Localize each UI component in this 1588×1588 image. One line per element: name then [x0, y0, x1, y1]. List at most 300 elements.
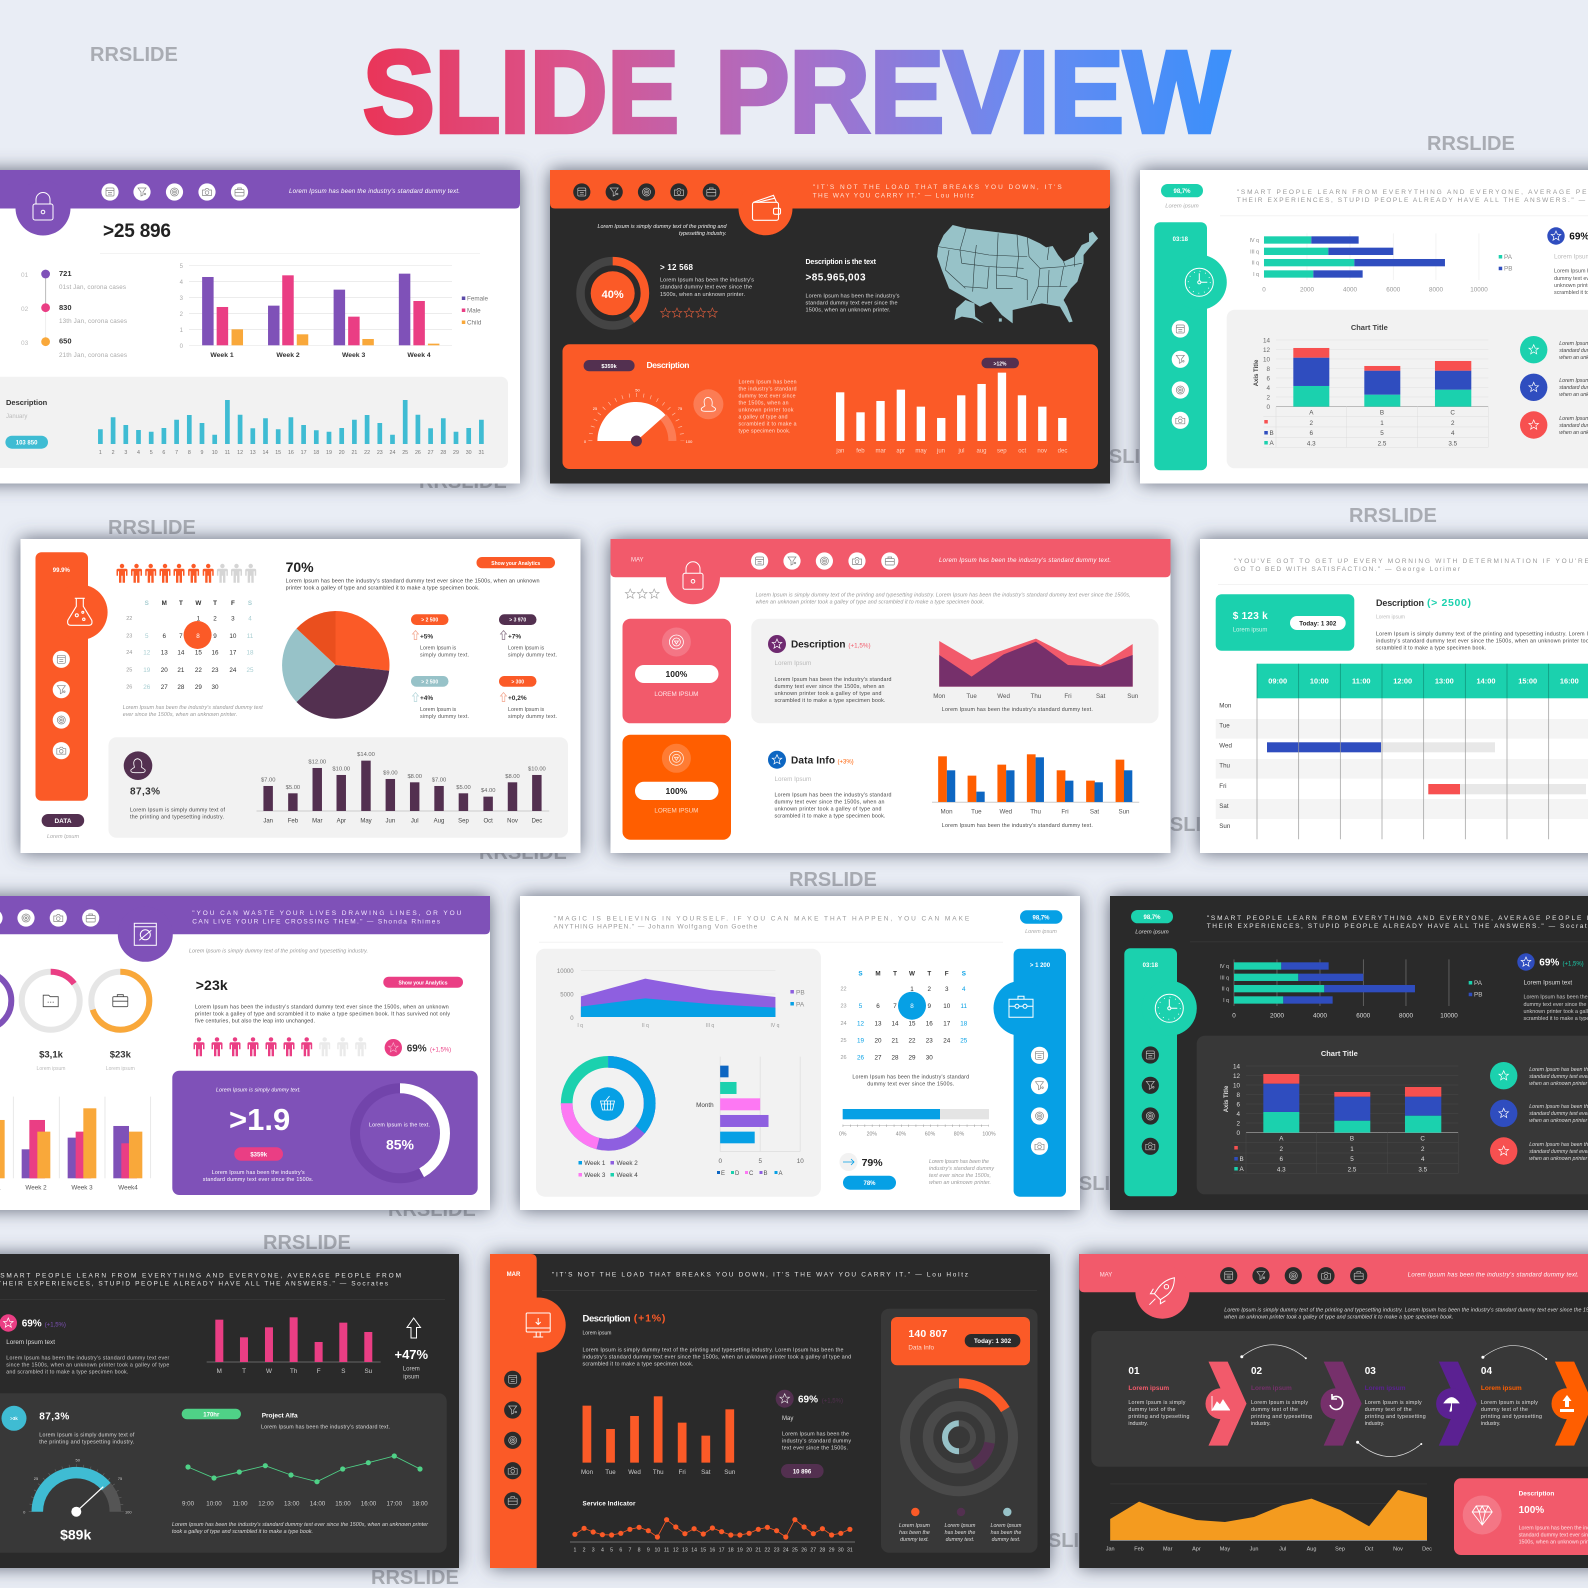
stacked bar chart: II q	[1222, 987, 1229, 993]
panel: radial progress: dummy text.	[992, 1537, 1020, 1543]
panel: radial progress: dummy text.	[946, 1537, 974, 1543]
pill: data: Lorem Ipsum	[47, 834, 79, 840]
panel: description area chart: (+1,5%)	[848, 642, 871, 650]
panel: radial progress: has been the	[899, 1530, 930, 1536]
line chart: service indicator: 6	[619, 1548, 622, 1554]
header band	[1079, 1254, 1588, 1292]
sidebar: > 1 200	[1030, 963, 1051, 969]
calendar: T	[213, 600, 217, 607]
line chart: service indicator: 26	[801, 1548, 807, 1554]
panel: daily bars: 4	[137, 450, 140, 456]
calendar: 24	[840, 1021, 847, 1027]
panel: slide 10 dark pink dashboard	[0, 1254, 459, 1568]
panel: gauge and line chart: 17:00	[387, 1500, 403, 1508]
stat: 79%: text ever since the 1500s,	[929, 1173, 991, 1179]
panel: daily bars: 1	[99, 450, 102, 456]
bar chart: week: Fri	[679, 1469, 686, 1476]
panel: orange gauge and bars: 50	[635, 388, 640, 392]
panel: slide 12 coral process: MAY	[1100, 1272, 1112, 1278]
line chart: service indicator: 28	[820, 1548, 825, 1554]
paragraph: printer took a galley of type and scrambled it to make a type specimen book. It has survived not only	[195, 1012, 450, 1018]
panel: daily bars: 103 850	[16, 441, 38, 447]
line chart: service indicator: 9	[647, 1548, 650, 1554]
pill: analytics: Show your Analytics	[398, 980, 448, 986]
kpi list: > 3 970	[509, 618, 526, 624]
panel: description area chart: Mon	[933, 693, 946, 700]
gantt table: 09:00	[1268, 676, 1287, 686]
intro text	[598, 224, 728, 237]
kpi list: simply dummy text.	[420, 714, 469, 720]
sidebar	[36, 552, 108, 801]
gantt table: Sat	[1219, 803, 1229, 810]
line chart: service indicator	[570, 1500, 855, 1554]
title: SLIDE	[363, 27, 679, 157]
line chart: service indicator: 27	[810, 1548, 816, 1554]
panel: gauge and line chart: 18:00	[412, 1500, 428, 1508]
sidebar: 99.9%	[53, 568, 70, 574]
icon: rocket badge	[1135, 1265, 1189, 1319]
description: scrambled it to make a type specimen book.	[1376, 646, 1486, 652]
progress bar: 100%	[982, 1132, 996, 1138]
sidebar	[1154, 222, 1227, 470]
horizontal bar chart: B	[764, 1171, 768, 1177]
panel: slide 11 orange dark dashboard	[490, 1254, 1050, 1568]
gantt table: 12:00	[1393, 676, 1412, 686]
slide background	[550, 170, 1110, 484]
panel: daily bars: 17	[301, 450, 307, 456]
arrow: up +47%	[394, 1318, 429, 1381]
gantt table: 13:00	[1435, 676, 1454, 686]
panel: description area chart: Sun	[1127, 693, 1139, 700]
panel: radial progress: 140 807	[908, 1328, 948, 1340]
quote: ANYTHING HAPPEN." — Johann Wolfgang Von Goethe	[554, 924, 758, 931]
calendar: 3	[945, 986, 949, 993]
panel: gauge and line chart: 25	[34, 1476, 39, 1481]
watermarks: RRSLIDE	[479, 842, 567, 864]
panel: chart title	[1227, 310, 1588, 468]
calendar note: dummy text ever since the 1500s.	[867, 1082, 954, 1088]
panel: purple summary: $359k	[250, 1153, 268, 1159]
panel: monthly revenue: $12.00	[308, 760, 326, 766]
area chart: yearly: Mar	[1163, 1546, 1173, 1552]
line chart: service indicator: 5	[610, 1548, 613, 1554]
calendar: 19	[143, 667, 151, 674]
bar chart: weekly: 5	[180, 264, 184, 270]
timeline: 03	[21, 340, 29, 347]
calendar: 13	[161, 650, 168, 656]
horizontal bar chart: E	[721, 1171, 725, 1177]
watermarks: RRSLIDE	[1141, 814, 1229, 836]
stacked bar chart: II q	[1252, 261, 1259, 267]
panel: purple summary: Lorem Ipsum is simply dummy text.	[216, 1088, 301, 1094]
stat: 69%: (+1,5%)	[45, 1322, 66, 1328]
quote	[813, 184, 1062, 200]
donut values: $3,1k	[39, 1050, 64, 1060]
section: data info bars: Thu	[1030, 808, 1041, 816]
section: data info bars: Tue	[971, 808, 982, 816]
panel: chart title: 8	[1266, 366, 1270, 373]
panel: monthly revenue: $7.00	[432, 778, 446, 784]
calendar: 14	[177, 650, 185, 656]
panel: process steps: industry.	[1481, 1421, 1501, 1427]
panel: slide 1 purple dashboard	[0, 170, 520, 484]
line chart: service indicator: 3	[592, 1548, 595, 1554]
calendar: 11	[961, 1003, 968, 1010]
quote: "YOU CAN WASTE YOUR LIVES DRAWING LINES, OR YOU	[192, 910, 462, 917]
progress bar: 40%	[896, 1132, 906, 1138]
panel: daily bars: 29	[453, 450, 459, 456]
calendar: 18	[246, 650, 254, 656]
stat: 12 568: 1500s, when an unknown printer.	[660, 292, 745, 298]
quote	[1207, 915, 1588, 930]
watermarks: RRSLIDE	[1050, 1173, 1138, 1195]
headline number: >25 896	[103, 221, 171, 242]
stat: 69%: May	[782, 1416, 793, 1422]
panel: slide 2 orange dark dashboard	[550, 170, 1110, 484]
panel: daily bars: 14	[263, 450, 268, 456]
quote: "SMART PEOPLE LEARN FROM EVERYTHING AND EVERYONE, AVERAGE PEOPLE FROM	[0, 1272, 401, 1280]
panel: process steps: 04	[1481, 1366, 1492, 1377]
horizontal bar chart: D	[735, 1171, 740, 1177]
intro text: when an unknown printer took a galley of type and scrambled it to make a type specimen book.	[1224, 1314, 1453, 1320]
stacked bar chart: 4000	[1313, 1012, 1327, 1020]
watermarks: RRSLIDE	[789, 869, 877, 891]
bar chart: weekly: Week 1	[210, 352, 234, 359]
panel: orange gauge and bars: scrambled it to make a	[738, 422, 797, 428]
panel: daily bars: 12	[237, 450, 243, 456]
sidebar: 03:18	[1143, 963, 1159, 969]
panel: process steps: Lorem Ipsum is simply	[1481, 1400, 1538, 1406]
panel: purple summary: Lorem Ipsum is the text.	[369, 1122, 430, 1128]
area chart: yearly: Oct	[1365, 1546, 1374, 1552]
bar chart: week: Mon	[581, 1469, 594, 1476]
gantt table: Tue	[1219, 722, 1230, 730]
calendar: 24	[943, 1038, 951, 1044]
calendar: 27	[161, 684, 168, 691]
panel: daily bars: 22	[364, 450, 370, 456]
bar chart: week: Thu	[653, 1469, 664, 1476]
panel: chart title: when an unknown printer	[1529, 1156, 1588, 1162]
panel: chart title: 5	[1380, 430, 1384, 437]
panel: chart title: 4	[1421, 1156, 1425, 1163]
panel: chart title: 4	[1236, 1111, 1240, 1118]
panel: orange gauge and bars: a galley of type and	[738, 414, 788, 420]
card: description 100%: 100%	[1519, 1505, 1544, 1516]
calendar: 29	[908, 1054, 916, 1062]
panel: process steps: industry.	[1365, 1421, 1384, 1427]
panel: monthly revenue: $7.00	[261, 778, 275, 784]
panel: gauge and line chart: 15:00	[335, 1500, 351, 1508]
intro text	[1224, 1308, 1588, 1320]
calendar: M	[162, 600, 167, 607]
panel: chart title: 10	[1263, 356, 1270, 364]
bar chart: week: Wed	[628, 1469, 641, 1476]
calendar: 5	[859, 1003, 863, 1010]
calendar: W	[195, 600, 201, 607]
description	[582, 1312, 851, 1368]
timeline: 830	[59, 303, 72, 312]
panel: process steps: dummy text of the	[1251, 1407, 1298, 1413]
slide background	[1140, 170, 1588, 484]
bar chart: weeks: Week 2	[25, 1184, 47, 1192]
area chart: PA	[796, 1002, 805, 1008]
stat: 79%: 79%	[862, 1157, 883, 1169]
panel: daily bars: 30	[466, 450, 472, 456]
panel: orange gauge and bars: 25	[593, 406, 598, 411]
pill: analytics: Show your Analytics	[491, 561, 541, 567]
pill: 98,7%	[1020, 910, 1062, 935]
panel: process steps: 03	[1365, 1366, 1376, 1377]
icon row	[101, 183, 248, 201]
horizontal bar chart	[696, 1057, 804, 1177]
panel: chart title: A	[1270, 440, 1274, 447]
kpi list: > 2 500	[421, 618, 438, 624]
panel: chart title: Chart Title	[1351, 323, 1388, 332]
bar chart: pink week: S	[341, 1368, 345, 1375]
timeline: 13th Jan, corona cases	[59, 318, 127, 325]
calendar: 17	[943, 1020, 951, 1028]
line chart: service indicator: 23	[774, 1548, 780, 1554]
panel: monthly revenue: Dec	[532, 818, 542, 824]
area chart: IV q	[771, 1023, 780, 1029]
line chart: service indicator: 22	[765, 1548, 770, 1554]
donut chart	[567, 1062, 650, 1179]
horizontal bar chart: C	[749, 1171, 754, 1177]
panel: description area chart: Lorem Ipsum has been the industry's standard	[774, 677, 892, 683]
header text: Lorem Ipsum has been the industry's standard dummy text.	[289, 188, 460, 195]
panel: radial progress	[881, 1309, 1038, 1553]
stat: 12 568: > 12 568	[660, 263, 694, 272]
calendar: 1	[197, 616, 201, 622]
line chart: service indicator: 17	[719, 1548, 725, 1554]
panel: monthly revenue: May	[360, 818, 372, 824]
panel: chart title: 4.3	[1307, 440, 1316, 448]
header text: Lorem Ipsum has been the industry's standard dummy text.	[1408, 1272, 1579, 1278]
pie chart	[282, 611, 390, 719]
line chart: service indicator: Service Indicator	[582, 1500, 636, 1508]
calendar: 10	[943, 1003, 951, 1010]
panel: monthly revenue	[108, 737, 568, 838]
stat: 85.965,003: Description is the text	[806, 259, 877, 266]
line chart: service indicator: 16	[710, 1548, 715, 1554]
calendar: 25	[840, 1038, 847, 1044]
headline: 70%: Lorem Ipsum has been the industry's standard dummy text ever since the 1500s, when an unknown	[286, 578, 540, 584]
stacked bar chart: III q	[1220, 975, 1229, 981]
stat: 85.965,003: standard dummy text ever since the	[806, 300, 898, 306]
bar chart: weekly: Week 3	[342, 352, 365, 359]
calendar note	[852, 1074, 969, 1088]
intro text: Lorem Ipsum is simply dummy text of the printing and typesetting industry.	[189, 948, 368, 954]
slide background	[0, 896, 490, 1210]
area chart: I q	[577, 1023, 583, 1029]
bar chart: weekly: Child	[467, 320, 482, 326]
map: USA	[937, 225, 1098, 323]
bar chart: weeks: Week 3	[71, 1184, 93, 1192]
panel: purple summary: Lorem Ipsum has been the industry's	[212, 1170, 305, 1176]
calendar: 22	[195, 667, 202, 674]
panel: monthly revenue: $8.00	[407, 774, 422, 780]
panel: daily bars: Description	[6, 398, 48, 407]
panel: process steps: printing and typesetting	[1365, 1414, 1426, 1420]
area chart: yearly: Sep	[1335, 1546, 1345, 1552]
stacked bar chart: 2000	[1270, 1012, 1284, 1020]
panel: process steps: Lorem ipsum	[1481, 1385, 1522, 1392]
timeline: 721	[59, 269, 72, 278]
stat: 85.965,003: Lorem Ipsum has been the industry's	[806, 294, 900, 300]
stacked bar chart: I q	[1253, 272, 1259, 278]
headline: 70%: printer took a galley of type and scrambled it to make a type specimen book.	[286, 586, 480, 592]
stat: 69%: 10 896	[793, 1470, 812, 1476]
calendar: 26	[840, 1055, 847, 1061]
stat: 85.965,003	[806, 259, 900, 314]
panel: chart title: 1	[1350, 1146, 1354, 1153]
panel: chart title: A	[1240, 1166, 1244, 1173]
bar chart: weekly: Week 4	[407, 352, 431, 359]
stacked bar chart: I q	[1223, 998, 1229, 1004]
stat: 12 568	[660, 263, 754, 317]
area chart: yearly: Aug	[1307, 1546, 1316, 1552]
panel: slide 5 coral dashboard: MAY	[631, 558, 644, 564]
card: description 100%: Description	[1519, 1490, 1554, 1498]
slide background	[1110, 896, 1588, 1210]
section: data info bars: dummy text ever since the 1500s, when an	[774, 800, 885, 806]
intro text	[756, 592, 1131, 606]
stat: 12 568: standard dummy text ever since the	[660, 285, 752, 291]
quote: THEIR EXPERIENCES, STUPID PEOPLE ALREADY HAVE ALL THE ANSWERS." — Socrates	[1207, 923, 1588, 930]
bar chart: pink week: Th	[290, 1368, 298, 1375]
panel: chart title: 14	[1233, 1064, 1240, 1070]
stat: 69%: Lorem Ipsum has been the	[782, 1432, 849, 1438]
panel: description area chart: Tue	[966, 693, 977, 700]
calendar: 15	[908, 1020, 916, 1028]
icon: lock badge	[16, 180, 70, 236]
donut values: $23k	[110, 1050, 132, 1060]
calendar: 8	[910, 1003, 914, 1010]
panel: gauge and line chart: 50	[75, 1458, 81, 1462]
kpi list: +4%	[420, 695, 433, 702]
panel: radial progress: Lorem Ipsum	[991, 1523, 1022, 1529]
line chart: service indicator: 2	[583, 1548, 586, 1554]
pill: analytics	[476, 557, 555, 568]
donut chart: Week 4	[616, 1172, 638, 1179]
panel: orange gauge and bars: may	[915, 448, 927, 454]
calendar: 12	[857, 1020, 864, 1028]
area chart: III q	[706, 1023, 714, 1029]
panel: chart title: 8	[1236, 1092, 1240, 1099]
headline: 70%	[286, 559, 540, 592]
panel: daily bars: 24	[390, 450, 395, 456]
timeline: 650	[59, 336, 72, 346]
panel: monthly revenue: Aug	[434, 818, 444, 824]
line chart: service indicator: 8	[638, 1548, 641, 1554]
panel: orange gauge and bars: the industry's standard	[738, 386, 797, 392]
bar chart: weekly: 0	[180, 344, 184, 350]
progress bar: 20%	[867, 1132, 877, 1138]
line chart: service indicator: 20	[746, 1548, 752, 1554]
slide background	[610, 539, 1170, 853]
card: description 100%	[1454, 1478, 1588, 1555]
panel: daily bars: 19	[326, 450, 332, 456]
timeline: 02	[21, 306, 29, 313]
pill: 98,7%	[1161, 184, 1203, 210]
stat: 69%: 69%	[22, 1318, 42, 1330]
gantt table: 10:00	[1310, 676, 1329, 686]
calendar	[840, 970, 968, 1062]
panel: slide 8 blue analytics	[520, 896, 1080, 1210]
panel: chart title: 2.5	[1348, 1166, 1357, 1174]
horizontal bar chart: 10	[797, 1158, 804, 1165]
panel: purple summary	[172, 1071, 478, 1195]
headline: 23k: >23k	[196, 977, 228, 993]
panel: daily bars: 9	[201, 450, 204, 456]
panel: orange gauge and bars: aug	[976, 448, 987, 454]
pill: 98,7%: 98,7%	[1173, 189, 1191, 195]
panel: gauge and line chart: 100	[125, 1510, 132, 1514]
horizontal bar chart: Month	[696, 1102, 714, 1109]
calendar note: ever since the 1500s, when an unknown printer.	[123, 712, 237, 718]
stat: 69%: Lorem Ipsum has been the industry's standard dummy text ever	[6, 1356, 170, 1362]
stacked bar chart: 10000	[1440, 1012, 1458, 1020]
panel: monthly revenue: $4.00	[481, 788, 495, 794]
panel: daily bars: 23	[377, 450, 383, 456]
calendar: 4	[962, 986, 966, 993]
calendar: 16	[211, 650, 219, 656]
panel: chart title: 2	[1266, 395, 1270, 402]
panel: daily bars: 6	[162, 450, 165, 456]
panel: orange gauge and bars: jul	[957, 448, 965, 454]
people pictogram	[116, 564, 256, 583]
panel: charts	[536, 949, 821, 1197]
calendar: 17	[229, 650, 237, 656]
kpi list: > 300	[511, 679, 524, 685]
donut chart: Week 1	[584, 1160, 606, 1167]
progress bar: 0%	[839, 1132, 847, 1138]
sidebar: 03:18	[1173, 237, 1189, 243]
kpi list: Lorem Ipsum is	[508, 646, 545, 652]
bar chart: pink week: Su	[364, 1368, 373, 1375]
panel: slide 6 schedule	[1200, 539, 1588, 853]
sidebar	[1124, 948, 1197, 1196]
stacked bar chart: PA	[1474, 980, 1483, 987]
panel: orange gauge and bars: dummy text ever since	[738, 394, 796, 400]
calendar: T	[927, 970, 931, 978]
panel: gauge and line chart: 9:00	[182, 1500, 195, 1508]
panel: monthly revenue: $10.00	[332, 766, 350, 772]
stacked bar chart: 8000	[1429, 286, 1443, 294]
panel: chart title: 12	[1233, 1073, 1240, 1080]
calendar: 25	[960, 1038, 968, 1044]
calendar note	[123, 705, 263, 718]
bar chart: weekly	[180, 264, 488, 359]
panel: orange gauge and bars: >12%	[994, 361, 1007, 367]
panel: slide 12 coral process	[1079, 1254, 1588, 1568]
calendar: 8	[196, 633, 200, 640]
panel: daily bars: 8	[188, 450, 191, 456]
bar chart: week: Sat	[701, 1469, 711, 1476]
panel: orange gauge and bars: Description	[646, 360, 690, 370]
line chart: service indicator: 19	[737, 1548, 743, 1554]
gantt table	[1216, 664, 1588, 839]
kpi list	[411, 614, 557, 720]
card: orange 100%: 100%	[666, 786, 688, 796]
line chart: service indicator: 24	[783, 1548, 789, 1554]
panel: orange gauge and bars: 75	[678, 406, 683, 411]
stat: 69%	[1517, 953, 1588, 1022]
progress bar	[839, 1109, 996, 1138]
bar chart: weekly: Female	[467, 296, 488, 302]
panel: slide 9 teal dark dashboard	[1110, 896, 1588, 1210]
pill: 98,7%: Lorem ipsum	[1025, 929, 1057, 935]
